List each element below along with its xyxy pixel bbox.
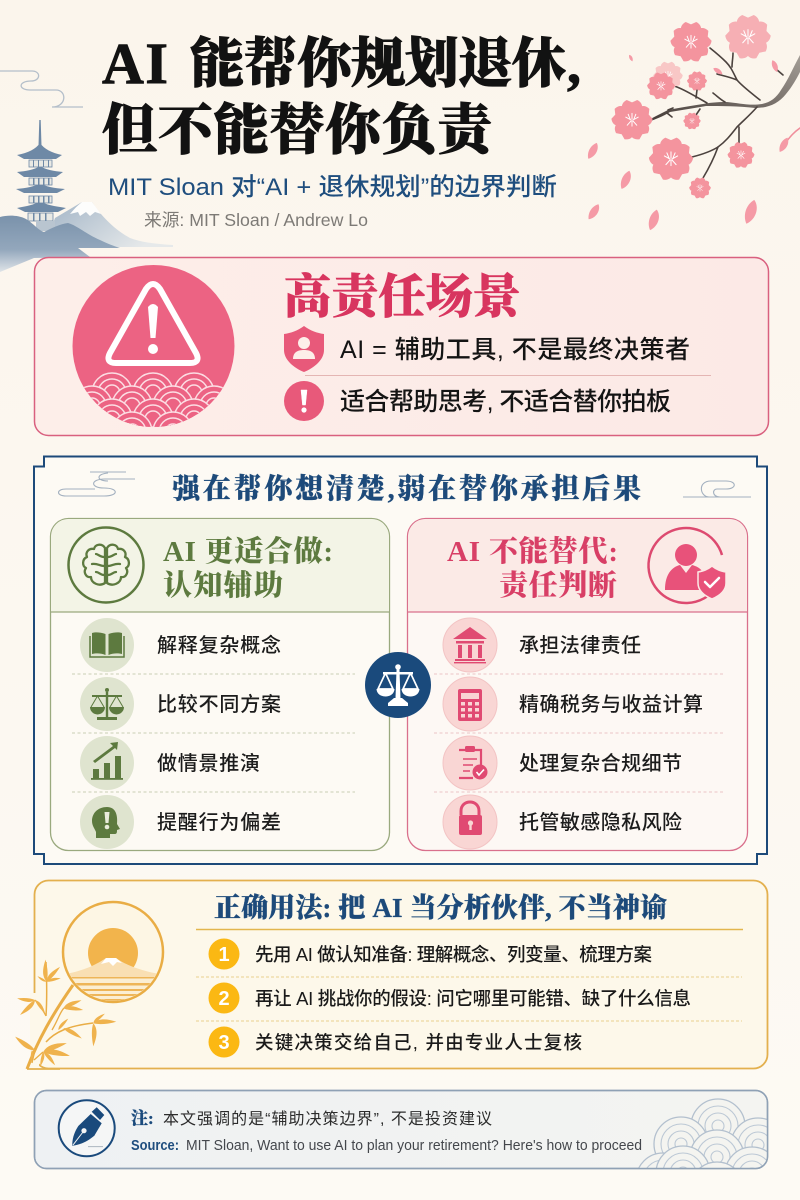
blossom flowers xyxy=(586,15,790,232)
Mount Fuji xyxy=(50,202,173,247)
row: privacy risk xyxy=(443,795,682,849)
title: AI xyxy=(102,31,168,96)
icon: fountain pen nib xyxy=(59,1100,115,1156)
step 2: 2 xyxy=(218,988,230,1010)
icon: exclamation badge xyxy=(284,381,324,421)
header decoration: clouds, pagoda and mountains xyxy=(0,71,173,272)
icon: person with shield xyxy=(649,528,726,603)
step 1: 1 xyxy=(218,944,230,966)
subtitle: MIT Sloan 对“AI + 退休规划”的边界判断 xyxy=(108,173,557,201)
row: privacy risk: 托管敏感隐私风险 xyxy=(519,811,682,834)
illustration: sun and Fuji medallion xyxy=(60,902,170,1008)
panel: comparison frame xyxy=(34,456,767,864)
title: 能帮你规划退休 xyxy=(190,34,566,94)
text: source: Source: xyxy=(131,1137,179,1154)
row: explain concepts: 解释复杂概念 xyxy=(157,633,281,657)
heading: responsibility judgment: 责任判断 xyxy=(499,569,617,602)
row: scenario simulation xyxy=(80,736,260,790)
row: compliance details xyxy=(443,736,682,790)
row: compare options: 比较不同方案 xyxy=(157,693,281,716)
row: compliance details: 处理复杂合规细节 xyxy=(519,752,682,775)
step 3 xyxy=(208,1026,582,1058)
row: tax calculation: 精确税务与收益计算 xyxy=(519,693,703,716)
row: behavior bias xyxy=(80,795,281,849)
icon: central balance scale xyxy=(365,652,431,718)
cherry blossom branch xyxy=(586,15,800,232)
row: compare options xyxy=(80,677,281,731)
title: , xyxy=(567,34,581,96)
icon: warning circle xyxy=(72,265,234,427)
text: note: 本文强调的是“辅助决策边界”, 不是投资建议 xyxy=(163,1110,492,1128)
decoration: cloud left xyxy=(58,472,135,496)
hills xyxy=(0,216,120,272)
title: 但不能替你负责 xyxy=(102,100,497,161)
heading: high responsibility: 高责任场景 xyxy=(284,271,522,324)
heading: cognitive assist: 认知辅助 xyxy=(163,569,283,602)
heading: AI better at: AI 更适合做: xyxy=(163,534,333,568)
illustration: bamboo xyxy=(13,960,116,1069)
panel: cognitive assist (left) xyxy=(50,518,390,850)
heading: comparison: 强在帮你想清楚,弱在替你承担后果 xyxy=(172,472,641,505)
row: behavior bias: 提醒行为偏差 xyxy=(157,811,281,834)
icon: brain xyxy=(68,528,144,602)
row: explain concepts xyxy=(80,618,281,672)
row: tax calculation xyxy=(443,677,703,731)
step 2 xyxy=(208,982,691,1014)
panel: note and source xyxy=(34,1090,768,1170)
step 2: 再让 AI 挑战你的假设: 问它哪里可能错、缺了什么信息 xyxy=(255,988,691,1009)
panel: correct usage xyxy=(13,880,768,1070)
title xyxy=(102,31,581,161)
row: scenario simulation: 做情景推演 xyxy=(157,752,260,775)
text: source: MIT Sloan, Want to use AI to plan your retirement? Here's how to proceed xyxy=(186,1137,642,1154)
text: AI is an assistive tool: AI = 辅助工具, 不是最终决策者 xyxy=(340,336,690,364)
row: legal responsibility xyxy=(443,618,641,672)
panel: high responsibility scenario xyxy=(34,258,768,452)
decoration: wave pattern xyxy=(638,1098,767,1168)
step 1: 先用 AI 做认知准备: 理解概念、列变量、梳理方案 xyxy=(255,944,652,965)
source line: 来源: MIT Sloan / Andrew Lo xyxy=(144,210,368,230)
decoration: cloud right xyxy=(683,481,751,497)
text: help think, not decide: 适合帮助思考, 不适合替你拍板 xyxy=(340,388,671,416)
heading: AI cannot replace: AI 不能替代: xyxy=(447,534,618,568)
row: legal responsibility: 承担法律责任 xyxy=(519,634,641,657)
step 1 xyxy=(208,938,652,970)
step 3: 关键决策交给自己, 并由专业人士复核 xyxy=(255,1032,582,1053)
heading: correct usage: 正确用法: 把 AI 当分析伙伴, 不当神谕 xyxy=(214,892,667,923)
pagoda xyxy=(16,120,66,212)
text: note: 注: xyxy=(131,1109,154,1128)
step 3: 3 xyxy=(218,1032,230,1054)
icon: person shield xyxy=(284,326,324,372)
panel: responsibility judgment (right) xyxy=(408,518,748,850)
